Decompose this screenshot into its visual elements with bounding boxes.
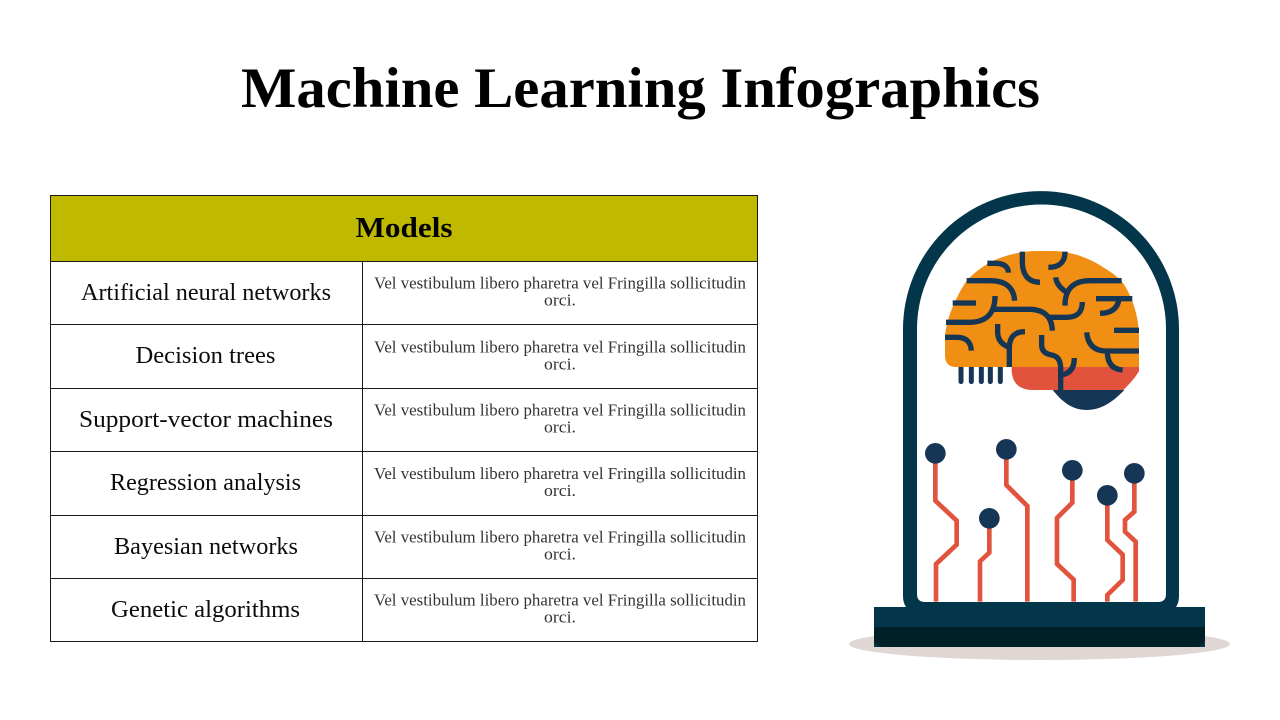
row: genetic algorithms bbox=[111, 590, 746, 626]
illustration: brain under glass dome bbox=[849, 191, 1230, 660]
row: regression analysis: Regression analysis bbox=[110, 469, 301, 496]
brain orange bbox=[945, 251, 1139, 367]
row: bayesian networks: Vel vestibulum libero pharetra vel Fringilla sollicitudin bbox=[374, 528, 746, 546]
row: support-vector machines bbox=[79, 400, 746, 436]
dome frame bbox=[903, 191, 1179, 612]
row: genetic algorithms: Vel vestibulum libero pharetra vel Fringilla sollicitudin bbox=[374, 590, 746, 610]
row: bayesian networks bbox=[114, 528, 746, 564]
row: artificial neural networks bbox=[81, 274, 746, 310]
table: models bbox=[50, 195, 758, 642]
row: artificial neural networks: Artificial neural networks bbox=[81, 279, 331, 306]
row: decision trees: orci. bbox=[544, 354, 576, 374]
row: decision trees: Decision trees bbox=[136, 342, 276, 369]
row: bayesian networks: Bayesian networks bbox=[114, 533, 298, 560]
title: Machine Learning Infographics bbox=[241, 57, 1040, 120]
base bbox=[874, 607, 1205, 647]
row: regression analysis bbox=[110, 464, 746, 500]
brain bbox=[945, 251, 1139, 410]
row: regression analysis: Vel vestibulum libero pharetra vel Fringilla sollicitudin bbox=[374, 464, 746, 483]
row: support-vector machines: Support-vector machines bbox=[79, 406, 333, 433]
row: support-vector machines: orci. bbox=[544, 418, 576, 436]
table header bbox=[50, 195, 758, 261]
ground shadow bbox=[849, 628, 1230, 660]
brain red band bbox=[1012, 367, 1139, 390]
brain circuit lines bbox=[945, 252, 1139, 390]
table header: Models bbox=[356, 212, 452, 244]
row: bayesian networks: orci. bbox=[544, 544, 576, 564]
circuit traces bbox=[925, 439, 1145, 602]
row: support-vector machines: Vel vestibulum libero pharetra vel Fringilla sollicitudin bbox=[374, 400, 746, 420]
brain lower lobe bbox=[1053, 390, 1124, 410]
row: genetic algorithms: orci. bbox=[544, 608, 576, 626]
row: genetic algorithms: Genetic algorithms bbox=[111, 596, 300, 623]
row: artificial neural networks: Vel vestibulum libero pharetra vel Fringilla sollicitudin bbox=[374, 274, 746, 292]
row: decision trees: Vel vestibulum libero pharetra vel Fringilla sollicitudin bbox=[374, 338, 746, 356]
brain teeth bbox=[961, 367, 1000, 382]
row: regression analysis: orci. bbox=[544, 481, 576, 500]
row: artificial neural networks: orci. bbox=[544, 290, 576, 310]
row: decision trees bbox=[136, 338, 746, 374]
